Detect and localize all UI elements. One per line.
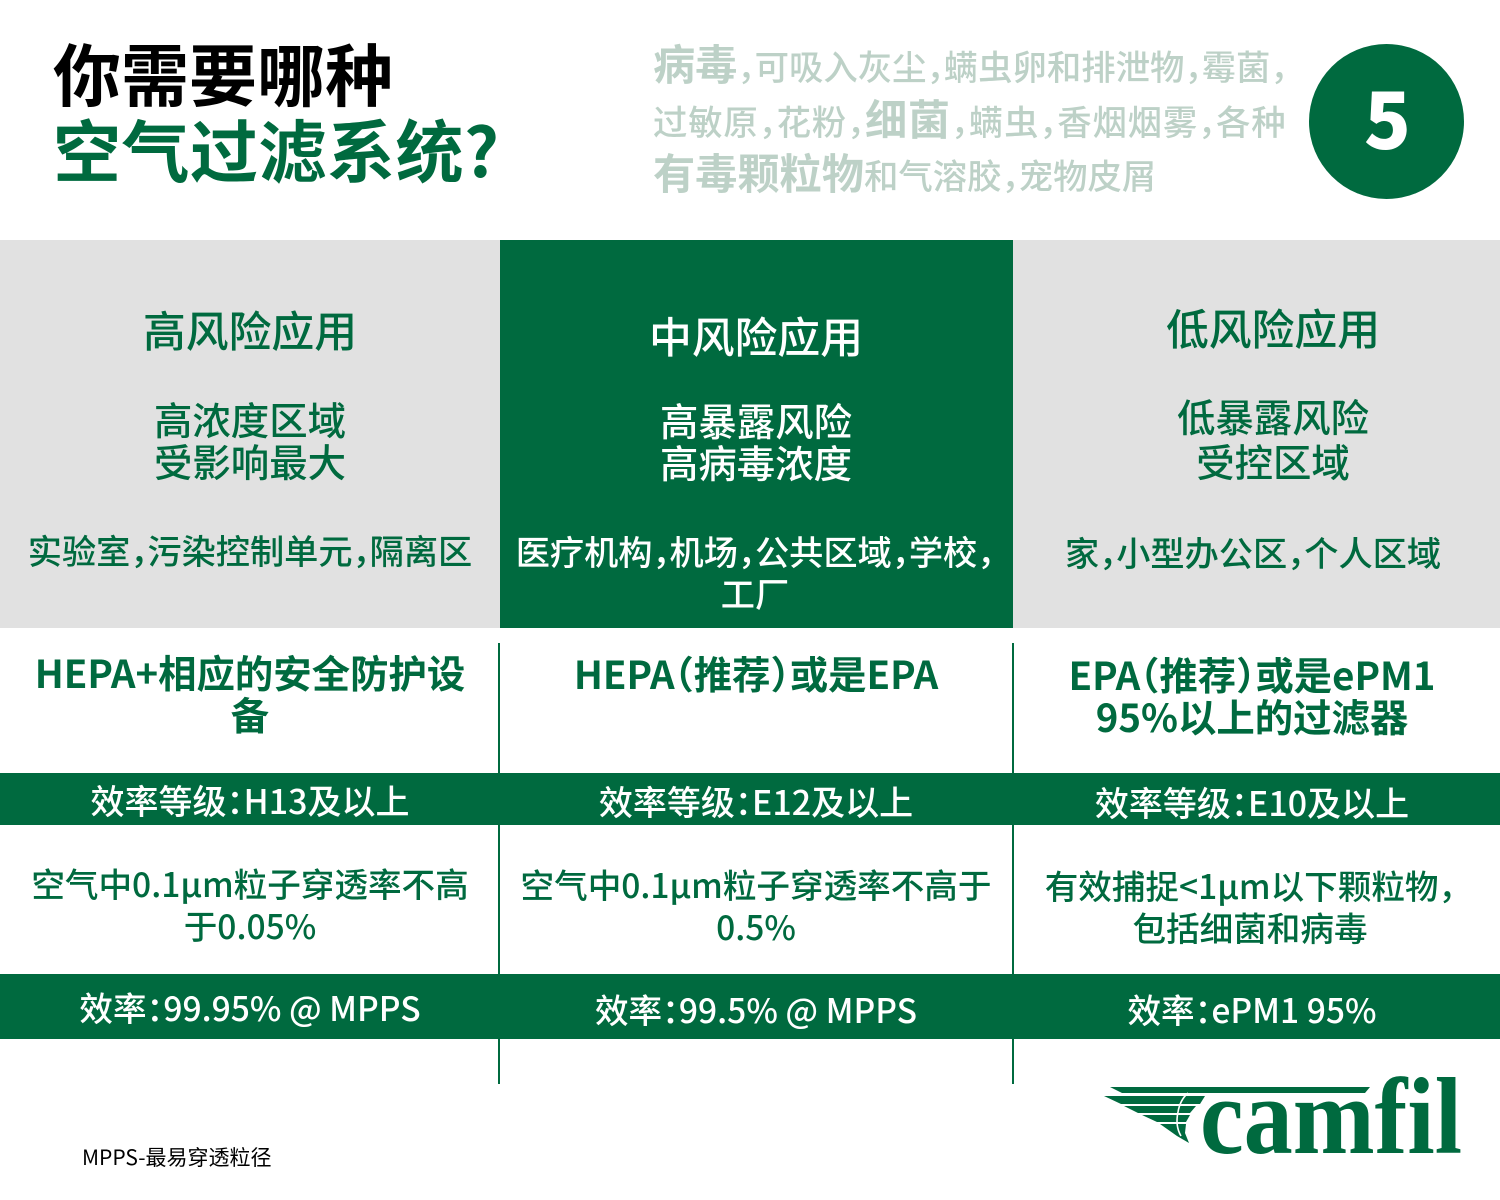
contaminant list: 病毒，可吸入灰尘，螨虫卵和排泄物，霉菌， (653, 32, 1288, 93)
filter recommendation low (1069, 646, 1435, 744)
low risk description: 受控区域 (1196, 433, 1350, 489)
penetration text medium: 0.5% (716, 901, 796, 950)
medium risk heading: 中风险应用 (649, 304, 863, 366)
efficiency bar (0, 974, 1500, 1039)
penetration text medium: 空气中0.1μm粒子穿透率不高于 (521, 859, 991, 908)
title: 空气过滤系统? (53, 98, 499, 197)
number badge: 5 (1364, 61, 1411, 172)
panel: low risk (1013, 240, 1500, 628)
filter recommendation high (35, 644, 465, 742)
low risk description: 低暴露风险 (1177, 388, 1369, 444)
efficiency low: 效率：ePM1 95% (1127, 984, 1377, 1033)
medium risk examples: 工厂 (721, 567, 789, 617)
contaminant list: 过敏原，花粉，细菌，螨虫，香烟烟雾，各种 (653, 87, 1286, 148)
penetration text high (31, 858, 469, 949)
number badge (1309, 44, 1464, 199)
high risk description: 高浓度区域 (154, 391, 346, 447)
filter recommendation high: 备 (231, 686, 269, 742)
filter recommendation low: EPA（推荐）或是ePM1 (1069, 646, 1435, 702)
low risk examples: 家，小型办公区，个人区域 (1065, 526, 1441, 576)
high risk heading: 高风险应用 (143, 298, 357, 360)
efficiency class bar (0, 773, 1500, 825)
high risk examples: 实验室，污染控制单元，隔离区 (28, 524, 472, 574)
low risk heading: 低风险应用 (1166, 296, 1380, 358)
medium risk description (660, 392, 852, 490)
title (53, 22, 499, 197)
low risk description (1177, 388, 1369, 489)
logo wings (1104, 1087, 1370, 1143)
efficiency medium: 效率：99.5% @ MPPS (595, 984, 917, 1033)
filter recommendation high: HEPA+相应的安全防护设 (35, 644, 465, 700)
high risk description (154, 391, 346, 489)
penetration text low: 有效捕捉<1μm以下颗粒物， (1045, 860, 1455, 909)
filter recommendation medium: HEPA（推荐）或是EPA (574, 645, 938, 701)
contaminant list (653, 32, 1288, 202)
penetration text low (1045, 860, 1455, 951)
penetration text medium (521, 859, 991, 950)
title: 你需要哪种 (53, 22, 393, 121)
medium risk description: 高病毒浓度 (660, 434, 852, 490)
efficiency high: 效率：99.95% @ MPPS (79, 982, 421, 1031)
class high: 效率等级：H13及以上 (91, 775, 409, 824)
penetration text high: 于0.05% (184, 900, 316, 949)
medium risk examples (516, 525, 994, 617)
panel: medium risk (500, 240, 1013, 628)
contaminant list: 有毒颗粒物和气溶胶，宠物皮屑 (653, 141, 1156, 202)
penetration text high: 空气中0.1μm粒子穿透率不高 (31, 858, 469, 907)
class low: 效率等级：E10及以上 (1095, 777, 1409, 826)
column divider left (498, 643, 500, 1084)
logo: camfil (1104, 1070, 1462, 1170)
panel: high risk (0, 240, 500, 628)
column divider right (1012, 643, 1014, 1084)
footnote: MPPS-最易穿透粒径 (82, 1142, 272, 1172)
medium risk examples: 医疗机构，机场，公共区域，学校， (516, 525, 994, 575)
filter recommendation low: 95%以上的过滤器 (1096, 688, 1408, 744)
medium risk description: 高暴露风险 (660, 392, 852, 448)
high risk description: 受影响最大 (154, 433, 346, 489)
class medium: 效率等级：E12及以上 (599, 776, 913, 825)
penetration text low: 包括细菌和病毒 (1132, 902, 1368, 951)
